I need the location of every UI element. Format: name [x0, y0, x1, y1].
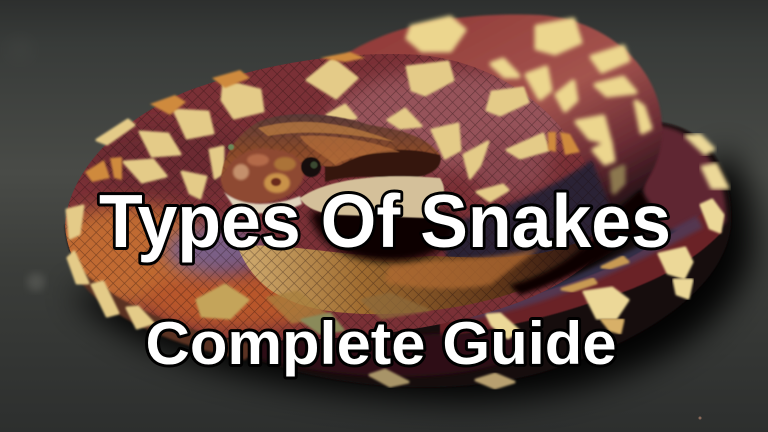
- white lips: [224, 192, 302, 213]
- title: Types Of Snakes: [99, 179, 671, 263]
- dark underside maroon: [240, 330, 520, 377]
- main coil: [65, 54, 594, 340]
- inner coil beneath head: [238, 236, 592, 314]
- lower outer coil: [65, 122, 731, 387]
- black crescent between coils: [510, 190, 660, 295]
- upper right coil section: [640, 125, 726, 240]
- snake ground shadow: [70, 150, 753, 402]
- lower-left seam strip: [68, 255, 262, 360]
- back coil diamonds: [408, 18, 650, 192]
- slate shadow on main coil: [440, 160, 612, 276]
- snake body coils: [45, 14, 731, 387]
- body pattern: cream diamonds: [67, 59, 548, 328]
- orange pattern accents: [85, 52, 580, 182]
- neck dark side: [325, 140, 441, 182]
- head crown: [221, 114, 440, 190]
- back coil: [345, 14, 662, 225]
- snout: [221, 148, 304, 203]
- right coil diamonds: [302, 135, 728, 388]
- red band with scales: [440, 205, 722, 338]
- snake head: [221, 114, 444, 218]
- pale neck stripe: [300, 176, 444, 218]
- subtitle: Complete Guide: [146, 310, 616, 377]
- black shadow below head: [310, 207, 457, 262]
- eye: [301, 157, 321, 177]
